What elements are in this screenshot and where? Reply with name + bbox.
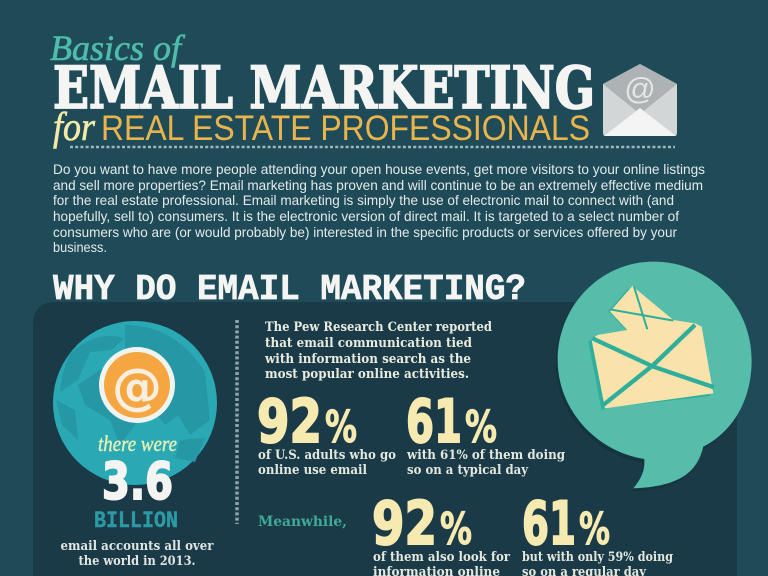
intro paragraph: business. [53, 239, 107, 255]
intro paragraph: and sell more properties? Email marketing has proven and will continue to be an extremely effective medium [53, 177, 703, 193]
icon: open envelope with at sign [603, 64, 677, 136]
stat: 92% look for information [372, 489, 511, 576]
icon: at sign badge: @ [112, 358, 162, 416]
intro paragraph: Do you want to have more people attending your open house events, get more visitors to your online listings [53, 161, 705, 177]
text: Pew research intro: with information search as the [264, 351, 471, 367]
stat: 92% of U.S. adults: of U.S. adults who go [258, 447, 396, 463]
title line: Email Marketing: EMAIL MARKETING [53, 54, 595, 122]
stat: 61% on a regular day: 61 [522, 489, 576, 559]
caption: email accounts all over [60, 539, 214, 554]
intro paragraph: consumers who are (or would probably be) interested in the specific products or services offered by your [53, 224, 677, 240]
stat: 92% look for information: of them also look for [373, 549, 511, 565]
label: billion: BILLION [94, 508, 178, 534]
icon: speech bubble with envelope [556, 262, 752, 492]
intro paragraph: hopefully, sell to) consumers. It is the electronic version of direct mail. It is targeted to a select number of [53, 208, 679, 224]
text: Pew research intro [264, 319, 493, 382]
stat: 61% on a typical day: so on a typical day [407, 462, 529, 478]
text: Pew research intro: that email communication tied [265, 335, 473, 351]
title [50, 28, 595, 149]
number: 3.6: 3.6 [102, 453, 173, 512]
stat: 92% of U.S. adults [257, 387, 396, 478]
intro paragraph [53, 161, 705, 255]
stat: 92% of U.S. adults: online use email [258, 462, 367, 478]
title word: for: for [53, 104, 95, 149]
stat: 61% on a regular day [522, 489, 674, 576]
panel: why do email marketing [33, 302, 737, 576]
stat: 92% look for information: 92 [372, 489, 437, 559]
stat: 61% on a typical day: 61 [406, 387, 462, 457]
intro paragraph: for the real estate professional. Email marketing is simply the use of electronic mail to connect with (and [53, 192, 674, 208]
title line: Real Estate Professionals: REAL ESTATE PROFESSIONALS [101, 109, 590, 148]
stat: 61% on a typical day: with 61% of them doing [406, 447, 566, 463]
stat: 92% look for information: % [440, 504, 472, 555]
stat: 61% on a regular day: but with only 59% doing [522, 549, 674, 565]
text: Pew research intro: most popular online activities. [265, 366, 469, 382]
label: there were: there were [98, 431, 177, 456]
label: Meanwhile: Meanwhile, [258, 514, 347, 530]
text: Pew research intro: The Pew Research Center reported [265, 319, 493, 335]
stat: 3.6 billion accounts [60, 431, 214, 569]
stat: 61% on a typical day: % [465, 402, 497, 453]
icon: at sign badge [99, 347, 175, 423]
stat: 92% of U.S. adults: 92 [257, 387, 322, 457]
stat: 61% on a regular day: % [579, 504, 610, 555]
title line: Basics of: Basics of [50, 28, 186, 68]
stat: 92% of U.S. adults: % [325, 402, 357, 453]
section heading: WHY DO EMAIL MARKETING? [53, 269, 526, 310]
icon: open envelope with at sign: @ [624, 71, 656, 106]
stat: 61% on a typical day [406, 387, 566, 478]
caption: the world in 2013. [78, 554, 196, 569]
icon: globe [53, 321, 217, 485]
caption [60, 539, 214, 569]
